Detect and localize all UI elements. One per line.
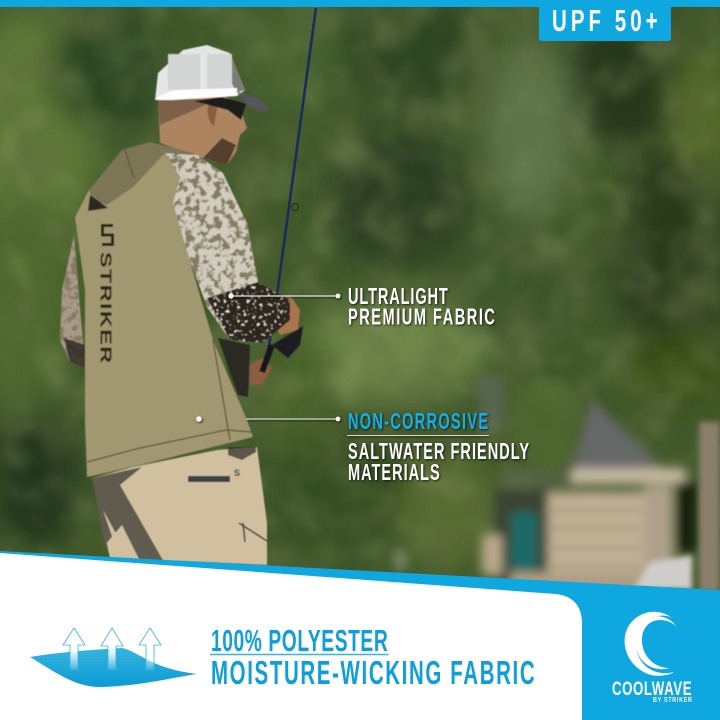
callout: non-corrosive materials: MATERIALS bbox=[348, 460, 440, 486]
icon: moisture-wicking fabric with arrows bbox=[30, 628, 197, 687]
logo: Coolwave by Striker: BY STRIKER bbox=[653, 696, 692, 704]
cap bbox=[155, 45, 270, 112]
top blue bar bbox=[0, 0, 720, 7]
STRIKER back logo: STRIKER bbox=[97, 252, 114, 363]
angler wearing the hoodie bbox=[55, 45, 303, 565]
white feature panel bbox=[0, 553, 582, 720]
icon: wave crescents bbox=[625, 612, 677, 676]
bottom blue band bbox=[0, 551, 720, 720]
heading: moisture-wicking fabric: MOISTURE-WICKING FABRIC bbox=[211, 654, 535, 691]
hood bbox=[88, 142, 197, 211]
heading: 100% polyester: 100% POLYESTER bbox=[211, 625, 388, 658]
tan torso bbox=[75, 153, 253, 477]
hand and reel bbox=[218, 295, 303, 397]
callout: ultralight fabric bbox=[228, 284, 495, 331]
fishing rod bbox=[265, 8, 316, 372]
callout: ultralight fabric: ULTRALIGHT bbox=[348, 284, 448, 310]
pants: S bbox=[234, 468, 240, 478]
callout: non-corrosive materials: SALTWATER FRIENDLY bbox=[348, 439, 529, 465]
neck and head bbox=[158, 92, 247, 165]
UPF badge: UPF 50+ bbox=[552, 3, 658, 38]
logo: Coolwave by Striker: COOLWAVE bbox=[612, 677, 692, 700]
pants bbox=[92, 447, 267, 565]
callout: non-corrosive materials: NON-CORROSIVE bbox=[348, 409, 488, 435]
callout: ultralight fabric: PREMIUM FABRIC bbox=[348, 304, 495, 331]
camouflage sleeve bbox=[160, 150, 295, 345]
left sleeve bbox=[55, 230, 90, 370]
logo: Coolwave by Striker bbox=[612, 612, 692, 704]
UPF badge bbox=[539, 0, 671, 41]
callout: non-corrosive materials bbox=[196, 409, 529, 486]
